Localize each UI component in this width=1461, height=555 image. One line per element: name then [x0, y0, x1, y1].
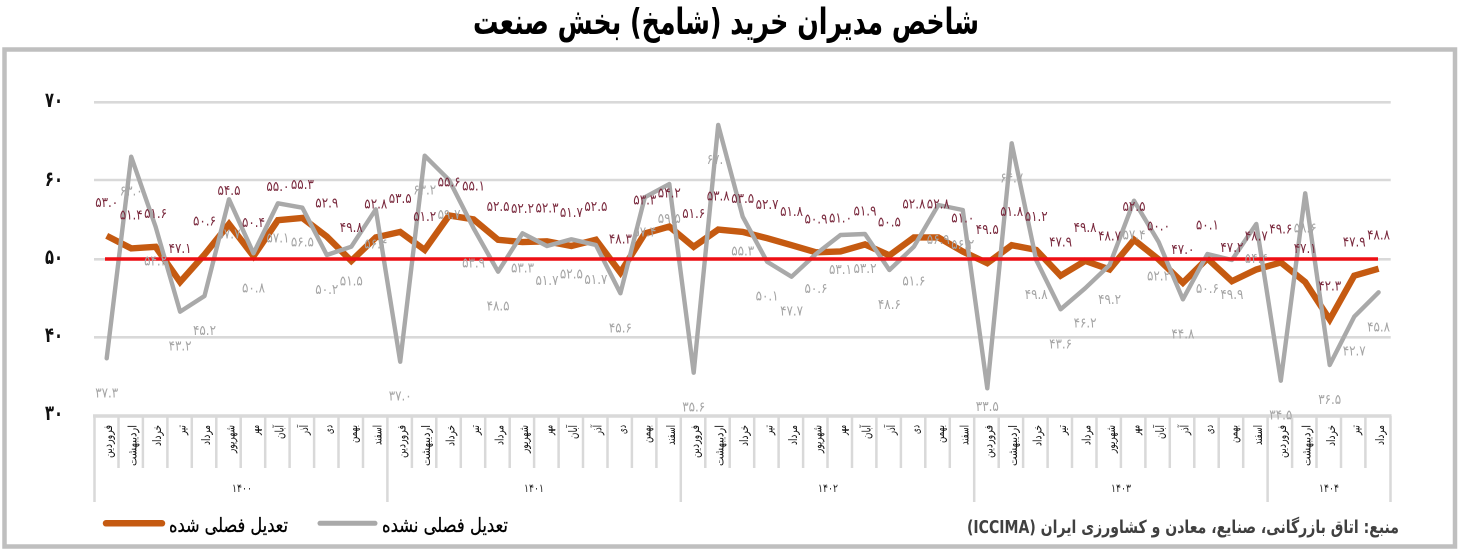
data labels: not seasonally adjusted: ۵۸.۶: [1294, 220, 1317, 236]
data labels: seasonally adjusted: ۴۹.۶: [1269, 221, 1292, 237]
data labels: not seasonally adjusted: ۶۳.۰: [120, 184, 143, 200]
month labels: مهر: [1128, 425, 1144, 436]
month labels: دی: [322, 425, 336, 434]
data labels: seasonally adjusted: ۴۷.۱: [1294, 241, 1317, 257]
data labels: seasonally adjusted: ۴۷.۱: [169, 241, 192, 257]
data labels: seasonally adjusted: ۵۳.۵: [731, 191, 754, 207]
data labels: seasonally adjusted: ۵۱.۴: [120, 207, 143, 223]
data labels: seasonally adjusted: ۵۲.۲: [511, 201, 534, 217]
month labels: دی: [615, 425, 629, 434]
month labels: مرداد: [786, 425, 801, 445]
month labels: آذر: [883, 425, 899, 436]
data labels: seasonally adjusted: ۴۸.۷: [1098, 228, 1122, 244]
month labels: خرداد: [1030, 425, 1046, 446]
month labels: مرداد: [492, 425, 508, 445]
month labels: فروردین: [101, 425, 116, 458]
month labels: دی: [908, 425, 922, 434]
data labels: not seasonally adjusted: ۴۹.۹: [1220, 287, 1243, 303]
data labels: not seasonally adjusted: ۴۸.۶: [878, 297, 901, 313]
month labels: خرداد: [737, 425, 752, 446]
x axis ticks: [94, 416, 1390, 502]
data labels: seasonally adjusted: ۵۳.۰: [95, 195, 118, 211]
month labels: خرداد: [1324, 425, 1339, 446]
data labels: seasonally adjusted: [95, 174, 1391, 294]
data labels: seasonally adjusted: ۵۲.۸: [927, 196, 950, 212]
y axis labels: ۴۰: [45, 323, 63, 347]
y axis labels: ۳۰: [45, 401, 63, 425]
data labels: seasonally adjusted: ۵۰.۴: [242, 215, 265, 231]
data labels: not seasonally adjusted: ۵۰.۲: [315, 282, 338, 298]
month labels: خرداد: [444, 425, 458, 446]
data labels: seasonally adjusted: ۵۱.۰: [951, 210, 974, 226]
month labels: اسفند: [1251, 425, 1265, 445]
data labels: not seasonally adjusted: ۴۶.۲: [1074, 315, 1097, 331]
data labels: seasonally adjusted: ۵۱.۲: [1025, 209, 1048, 225]
data labels: seasonally adjusted: ۴۷.۰: [1171, 242, 1194, 258]
data labels: not seasonally adjusted: ۵۴.۴: [1245, 251, 1268, 267]
grid lines: [93, 102, 1392, 416]
data labels: not seasonally adjusted: ۵۱.۷: [584, 272, 608, 288]
data labels: not seasonally adjusted: ۵۵.۳: [731, 244, 755, 260]
data labels: not seasonally adjusted: ۴۲.۷: [1343, 344, 1366, 360]
data labels: not seasonally adjusted: ۵۶.۴: [364, 236, 387, 252]
data labels: not seasonally adjusted: ۵۱.۵: [340, 274, 363, 290]
month labels: شهریور: [1104, 425, 1119, 454]
legend: not seasonally adjusted: تعدیل فصلی نشده: [382, 513, 508, 537]
data labels: not seasonally adjusted: ۵۹.۵: [658, 211, 681, 227]
year labels: ۱۴۰۳: [1111, 481, 1131, 495]
month labels: خرداد: [150, 425, 165, 446]
data labels: not seasonally adjusted: ۵۶.۲: [951, 237, 974, 253]
data labels: seasonally adjusted: ۴۹.۸: [340, 220, 363, 236]
month labels: آذر: [1176, 425, 1192, 436]
data labels: seasonally adjusted: ۵۵.۳: [291, 177, 314, 193]
month labels: [101, 425, 1388, 466]
data labels: seasonally adjusted: ۵۱.۸: [780, 204, 804, 220]
month labels: مهر: [542, 425, 556, 436]
data labels: seasonally adjusted: ۴۸.۸: [1367, 228, 1391, 244]
data labels: not seasonally adjusted: ۵۳.۹: [462, 255, 485, 271]
month labels: اردیبهشت: [1006, 425, 1021, 466]
month labels: اسفند: [958, 425, 972, 445]
month labels: مرداد: [1373, 425, 1388, 445]
month labels: اردیبهشت: [419, 425, 434, 466]
data labels: seasonally adjusted: ۵۱.۶: [144, 206, 167, 222]
data labels: not seasonally adjusted: ۴۵.۶: [609, 320, 632, 336]
data labels: not seasonally adjusted: ۶۳.۲: [413, 183, 436, 199]
data labels: not seasonally adjusted: ۵۰.۸: [242, 280, 265, 296]
month labels: تیر: [762, 425, 776, 436]
year labels: ۱۴۰۲: [818, 481, 838, 495]
data labels: seasonally adjusted: ۵۱.۷: [560, 205, 583, 221]
data labels: seasonally adjusted: ۵۲.۳: [536, 200, 559, 216]
month labels: آبان: [858, 425, 874, 439]
month labels: اردیبهشت: [712, 425, 728, 466]
data labels: not seasonally adjusted: [95, 152, 1391, 424]
month labels: تیر: [1348, 425, 1364, 436]
data labels: not seasonally adjusted: ۴۳.۶: [1049, 336, 1072, 352]
data labels: seasonally adjusted: ۵۲.۸: [364, 196, 388, 212]
data labels: seasonally adjusted: ۵۱.۹: [854, 203, 876, 219]
month labels: مرداد: [199, 425, 214, 445]
data labels: seasonally adjusted: ۴۸.۷: [1245, 228, 1268, 244]
data labels: not seasonally adjusted: ۵۶.۹: [927, 232, 950, 248]
data labels: seasonally adjusted: ۵۰.۶: [193, 214, 216, 230]
year labels: ۱۴۰۱: [524, 481, 544, 495]
data labels: not seasonally adjusted: ۴۵.۲: [193, 323, 216, 339]
data labels: seasonally adjusted: ۵۴.۵: [218, 183, 240, 199]
month labels: بهمن: [346, 425, 361, 443]
data labels: not seasonally adjusted: ۶۷.۰: [707, 152, 730, 168]
data labels: not seasonally adjusted: ۵۰.۶: [1196, 281, 1219, 297]
month labels: اسفند: [370, 425, 384, 445]
data labels: not seasonally adjusted: ۳۷.۳: [95, 385, 119, 401]
data labels: not seasonally adjusted: ۵۱.۷: [536, 273, 559, 289]
data labels: seasonally adjusted: ۵۱.۸: [1000, 204, 1024, 220]
line: seasonally adjusted series: [107, 216, 1379, 320]
data labels: seasonally adjusted: ۵۵.۰: [266, 179, 289, 195]
legend: seasonally adjusted: تعدیل فصلی شده: [169, 513, 288, 537]
month labels: فروردین: [982, 425, 996, 458]
month labels: اردیبهشت: [1300, 425, 1314, 466]
data labels: seasonally adjusted: ۴۷.۹: [1049, 235, 1072, 251]
data labels: not seasonally adjusted: ۴۹.۲: [1098, 292, 1121, 308]
data labels: not seasonally adjusted: ۵۳.۳: [511, 260, 534, 276]
month labels: بهمن: [1226, 425, 1242, 443]
data labels: not seasonally adjusted: ۵۷.۴: [1122, 228, 1146, 244]
year labels: [232, 481, 1339, 495]
month labels: آبان: [1152, 425, 1167, 439]
data labels: seasonally adjusted: ۴۷.۲: [1220, 240, 1243, 256]
month labels: تیر: [174, 425, 190, 436]
month labels: اسفند: [664, 425, 678, 445]
data labels: not seasonally adjusted: ۴۷.۷: [780, 304, 804, 320]
data labels: seasonally adjusted: ۵۴.۲: [658, 186, 681, 202]
month labels: بهمن: [933, 425, 948, 443]
data labels: not seasonally adjusted: ۳۷.۰: [389, 389, 412, 405]
month labels: مهر: [248, 425, 263, 436]
data labels: seasonally adjusted: ۴۲.۳: [1318, 278, 1342, 294]
data labels: seasonally adjusted: ۵۳.۳: [633, 192, 657, 208]
year labels: ۱۴۰۴: [1319, 481, 1339, 495]
y axis labels: ۶۰: [45, 167, 63, 191]
data labels: seasonally adjusted: ۵۵.۱: [462, 178, 485, 194]
title: شاخص مدیران خرید (شامخ) بخش صنعت: [473, 2, 979, 43]
data labels: seasonally adjusted: ۵۰.۱: [1196, 218, 1219, 234]
data labels: seasonally adjusted: ۴۹.۵: [976, 222, 999, 238]
month labels: بهمن: [640, 425, 654, 443]
month labels: فروردین: [688, 425, 703, 458]
month labels: تیر: [1055, 425, 1070, 436]
data labels: seasonally adjusted: ۵۲.۸: [902, 196, 926, 212]
month labels: شهریور: [224, 425, 238, 454]
month labels: آبان: [272, 425, 286, 439]
data labels: seasonally adjusted: ۵۲.۷: [756, 197, 779, 213]
data labels: not seasonally adjusted: ۵۲.۲: [1147, 269, 1170, 285]
data labels: seasonally adjusted: ۵۲.۵: [1122, 199, 1146, 215]
data labels: not seasonally adjusted: ۶۴.۷: [1000, 170, 1024, 186]
data labels: not seasonally adjusted: ۴۸.۵: [487, 299, 510, 315]
month labels: فروردین: [394, 425, 410, 458]
data labels: not seasonally adjusted: ۳۵.۶: [682, 400, 705, 416]
month labels: مرداد: [1080, 425, 1094, 445]
data labels: seasonally adjusted: ۵۲.۵: [487, 199, 510, 215]
data labels: seasonally adjusted: ۵۲.۹: [315, 196, 338, 212]
data labels: not seasonally adjusted: ۵۹.۷: [438, 207, 461, 223]
data labels: seasonally adjusted: ۵۲.۵: [584, 199, 607, 215]
y axis labels: ۷۰: [45, 88, 63, 112]
data labels: seasonally adjusted: ۴۹.۸: [1074, 220, 1097, 236]
data labels: not seasonally adjusted: ۵۶.۵: [291, 235, 314, 251]
line: not seasonally adjusted series: [107, 125, 1379, 388]
month labels: مهر: [835, 425, 850, 436]
data labels: seasonally adjusted: ۵۰.۹: [804, 211, 828, 227]
month labels: شهریور: [517, 425, 532, 454]
data labels: not seasonally adjusted: ۵۷.۷: [218, 226, 241, 242]
data labels: not seasonally adjusted: ۳۶.۵: [1318, 392, 1341, 408]
month labels: دی: [1202, 425, 1216, 434]
data labels: not seasonally adjusted: ۵۲.۵: [560, 266, 583, 282]
data labels: not seasonally adjusted: ۴۳.۲: [169, 339, 192, 355]
data labels: seasonally adjusted: ۵۰.۵: [878, 214, 901, 230]
month labels: آبان: [565, 425, 580, 439]
y axis labels: ۵۰: [45, 245, 63, 269]
data labels: not seasonally adjusted: ۵۴.۲: [144, 254, 167, 270]
data labels: seasonally adjusted: ۵۳.۵: [389, 191, 412, 207]
year labels: ۱۴۰۰: [232, 481, 252, 495]
data labels: seasonally adjusted: ۴۷.۹: [1343, 235, 1366, 251]
month labels: آذر: [296, 425, 312, 436]
data labels: not seasonally adjusted: ۵۰.۶: [804, 281, 828, 297]
data labels: not seasonally adjusted: ۵۳.۲: [854, 261, 876, 277]
month labels: تیر: [468, 425, 483, 436]
data labels: seasonally adjusted: ۵۱.۰: [829, 210, 852, 226]
data labels: seasonally adjusted: ۵۳.۸: [707, 189, 730, 205]
data labels: not seasonally adjusted: ۴۴.۸: [1171, 326, 1195, 342]
threshold line at 50: [105, 257, 1378, 261]
data labels: not seasonally adjusted: ۳۳.۵: [976, 399, 999, 415]
month labels: اردیبهشت: [126, 425, 140, 466]
month labels: شهریور: [810, 425, 826, 454]
data labels: seasonally adjusted: ۵۱.۶: [682, 206, 705, 222]
data labels: seasonally adjusted: ۵۵.۶: [438, 174, 461, 190]
data labels: not seasonally adjusted: ۵۳.۱: [829, 262, 852, 278]
month labels: فروردین: [1275, 425, 1290, 458]
data labels: seasonally adjusted: ۵۱.۲: [413, 209, 436, 225]
data labels: not seasonally adjusted: ۳۴.۵: [1269, 408, 1292, 424]
data labels: not seasonally adjusted: ۵۷.۱: [266, 230, 289, 246]
y axis labels: [45, 88, 63, 425]
data labels: seasonally adjusted: ۴۸.۳: [609, 232, 632, 248]
month labels: آذر: [590, 425, 606, 436]
data labels: not seasonally adjusted: ۵۷.۴: [633, 224, 656, 240]
data labels: not seasonally adjusted: ۵۱.۶: [902, 274, 925, 290]
data labels: seasonally adjusted: ۵۰.۰: [1147, 218, 1170, 234]
data labels: not seasonally adjusted: ۴۵.۸: [1367, 319, 1391, 335]
data labels: not seasonally adjusted: ۵۰.۱: [756, 289, 779, 305]
data labels: not seasonally adjusted: ۴۹.۸: [1025, 287, 1048, 303]
